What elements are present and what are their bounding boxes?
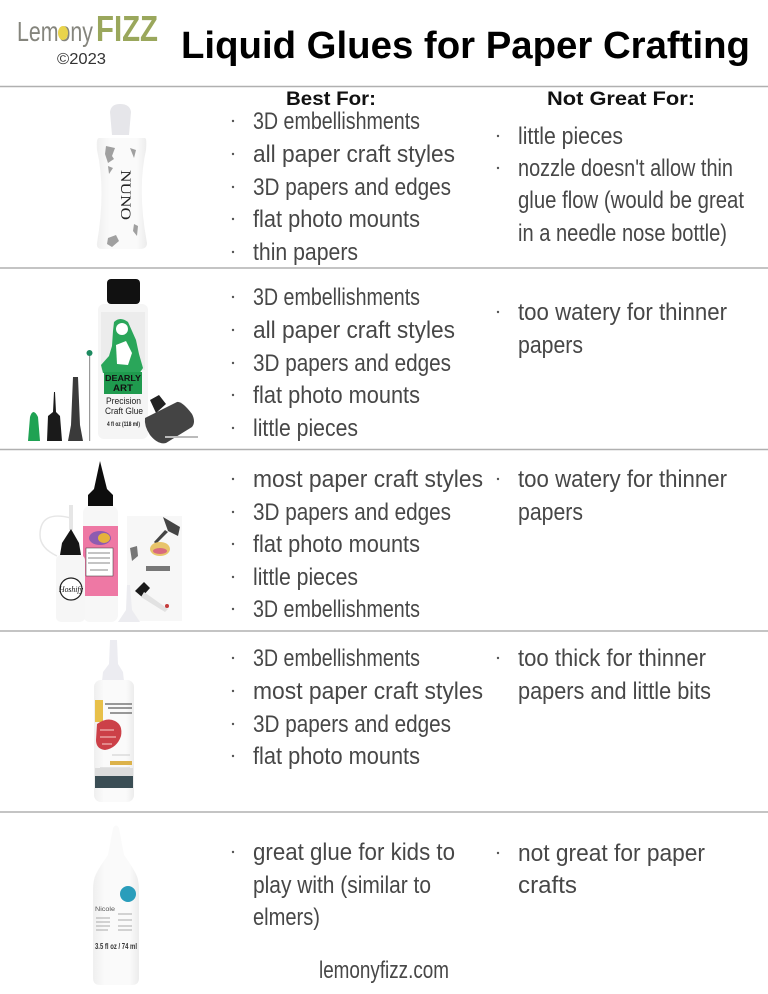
best for list: row 1: 3D embellishments <box>253 108 420 135</box>
not great for list: row 5: crafts <box>518 872 577 899</box>
best for list: row 5: elmers) <box>253 904 320 931</box>
not great for list: row 3: papers <box>518 499 583 526</box>
best for list: row 2: all paper craft styles <box>253 317 455 344</box>
best for list: row 1 <box>232 108 455 266</box>
best for list: row 2 <box>232 284 455 442</box>
best for list: row 4: 3D embellishments <box>253 645 420 672</box>
icon: craft glue bottle set <box>40 461 182 622</box>
best for list: row 3: little pieces <box>253 564 358 591</box>
best for list: row 2: 3D papers and edges <box>253 350 451 377</box>
icon: Nuno glue bottle: NUNO <box>117 170 133 220</box>
not great for list: row 1 <box>497 123 744 247</box>
best for list: row 5: great glue for kids to <box>253 839 455 866</box>
best for list: row 3: flat photo mounts <box>253 531 420 558</box>
best for list: row 4: most paper craft styles <box>253 678 483 705</box>
not great for list: row 1: in a needle nose bottle) <box>518 220 727 247</box>
best for list: row 5 <box>232 839 455 931</box>
best for list: row 4 <box>232 645 483 770</box>
best for list: row 2: 3D embellishments <box>253 284 420 311</box>
icon: white glue bottle with red label <box>94 640 134 802</box>
best for list: row 1: 3D papers and edges <box>253 174 451 201</box>
logo: LemonyFizz: ©2023 <box>57 51 106 68</box>
best for list: row 3: most paper craft styles <box>253 466 483 493</box>
not great for list: row 5: not great for paper <box>518 840 705 867</box>
not great for list: row 1: little pieces <box>518 123 623 150</box>
best for list: row 1: flat photo mounts <box>253 206 420 233</box>
best for list: row 3: 3D papers and edges <box>253 499 451 526</box>
icon: Nuno glue bottle <box>97 104 147 249</box>
icon: Dearly Art precision craft glue with tips: Precision <box>106 396 141 406</box>
best for list: row 5: play with (similar to <box>253 872 431 899</box>
not great for list: row 4: papers and little bits <box>518 678 711 705</box>
logo: LemonyFizz: FIZZ <box>96 8 158 49</box>
icon: kids white glue bottle: Nicole <box>95 907 116 913</box>
heading: best for: Best For: <box>286 89 376 110</box>
icon: Dearly Art precision craft glue with tips: DEARLY <box>105 374 142 383</box>
best for list: row 2: flat photo mounts <box>253 382 420 409</box>
not great for list: row 5 <box>497 840 705 899</box>
icon: Dearly Art precision craft glue with tips: 4 fl oz (118 ml) <box>107 422 140 428</box>
not great for list: row 3: too watery for thinner <box>518 466 727 493</box>
best for list: row 4: 3D papers and edges <box>253 711 451 738</box>
best for list: row 3: 3D embellishments <box>253 596 420 623</box>
icon: craft glue bottle set: Hoshify <box>58 585 83 594</box>
not great for list: row 4: too thick for thinner <box>518 645 706 672</box>
not great for list: row 2: papers <box>518 332 583 359</box>
icon: Dearly Art precision craft glue with tips: ART <box>113 383 134 393</box>
heading: not great for: Not Great For: <box>547 89 695 110</box>
title: Liquid Glues for Paper Crafting <box>181 25 750 67</box>
best for list: row 3 <box>232 466 483 623</box>
not great for list: row 2: too watery for thinner <box>518 299 727 326</box>
logo: LemonyFizz: Lemony <box>17 16 93 47</box>
icon: Dearly Art precision craft glue with tips <box>28 279 198 443</box>
best for list: row 1: thin papers <box>253 239 358 266</box>
icon: kids white glue bottle: 3.5 fl oz / 74 ml <box>95 942 137 951</box>
footer website: lemonyfizz.com <box>319 957 449 984</box>
best for list: row 4: flat photo mounts <box>253 743 420 770</box>
not great for list: row 3 <box>497 466 727 526</box>
icon: kids white glue bottle <box>93 826 139 985</box>
best for list: row 2: little pieces <box>253 415 358 442</box>
not great for list: row 4 <box>497 645 711 705</box>
icon: Dearly Art precision craft glue with tips: Craft Glue <box>105 406 143 416</box>
not great for list: row 2 <box>497 299 727 359</box>
logo: LemonyFizz <box>17 8 158 68</box>
best for list: row 1: all paper craft styles <box>253 141 455 168</box>
